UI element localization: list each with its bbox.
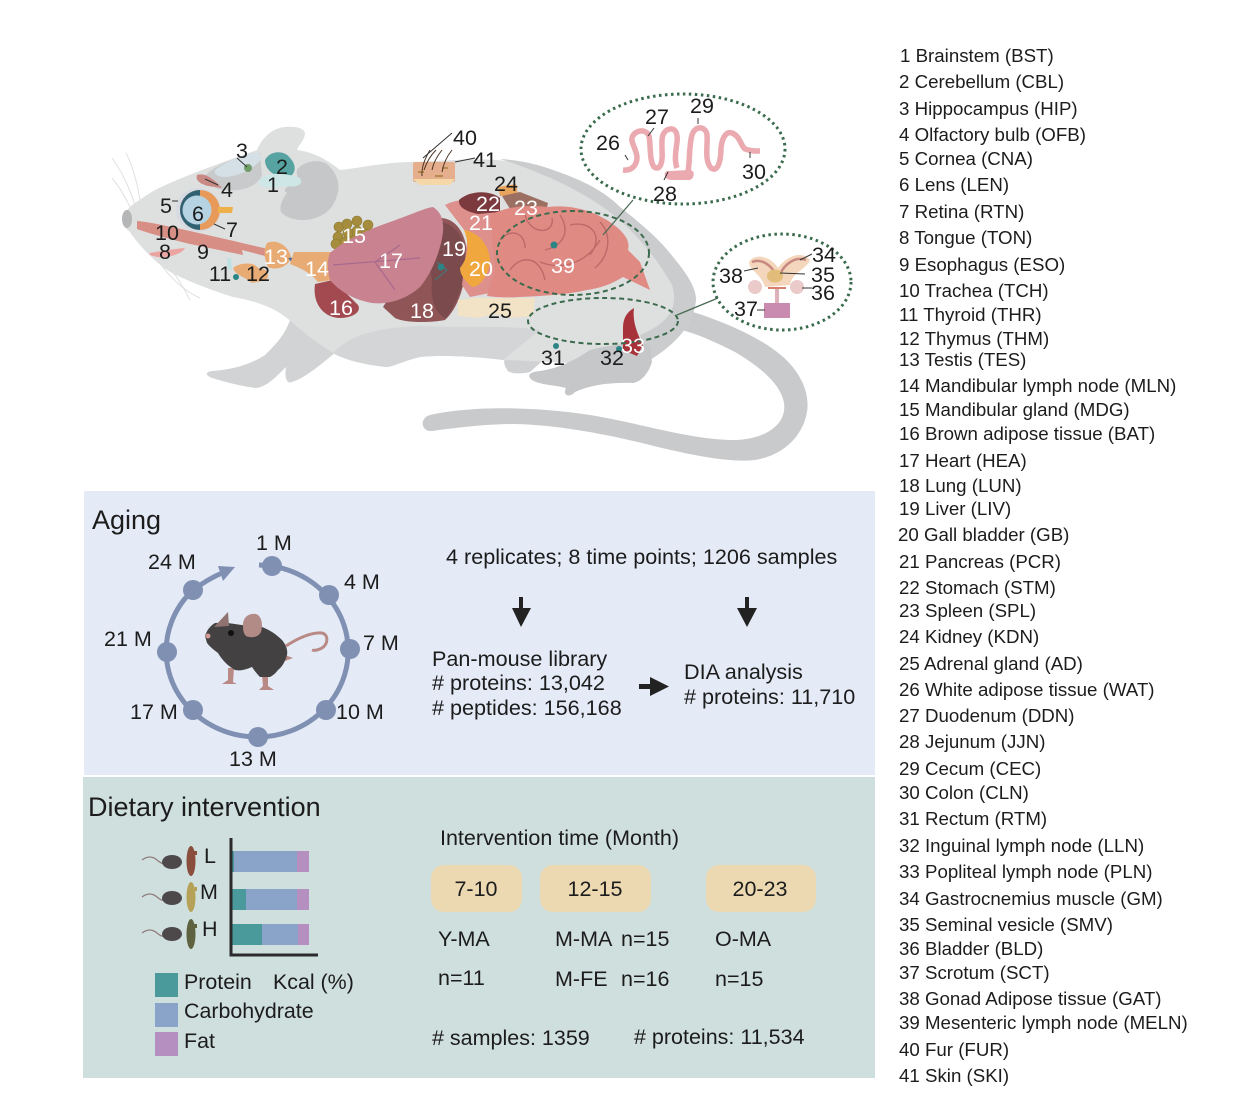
mandibular lymph node xyxy=(290,252,333,282)
callout connector lines xyxy=(603,200,718,315)
organ number labels: 29 xyxy=(690,94,714,118)
tissue list: 8 Tongue (TON) xyxy=(899,227,1032,248)
far hind foot xyxy=(504,356,548,373)
lung xyxy=(383,218,467,322)
organ number labels: 18 xyxy=(410,299,434,323)
tissue list: 39 Mesenteric lymph node (MELN) xyxy=(899,1012,1188,1033)
tissue list: 41 Skin (SKI) xyxy=(899,1065,1009,1086)
anatomical mouse diagram xyxy=(112,94,851,461)
panel: dietary intervention xyxy=(83,777,875,1078)
tissue list: 24 Kidney (KDN) xyxy=(899,626,1039,647)
organ number labels: 13 xyxy=(264,245,288,269)
tissue list: 3 Hippocampus (HIP) xyxy=(899,98,1078,119)
tissue list: 29 Cecum (CEC) xyxy=(899,758,1041,779)
liver xyxy=(430,222,466,318)
dashed ellipses xyxy=(497,94,851,344)
leader lines xyxy=(172,118,812,310)
organ number labels: 20 xyxy=(469,257,493,281)
time box: 20-23 xyxy=(706,865,816,912)
mouse tail xyxy=(423,311,808,461)
tissue list: 6 Lens (LEN) xyxy=(899,174,1009,195)
tissue list: 33 Popliteal lymph node (PLN) xyxy=(899,861,1152,882)
organ number labels: 6 xyxy=(192,202,204,226)
tissue list: 5 Cornea (CNA) xyxy=(899,148,1033,169)
organ number labels: 2 xyxy=(276,155,288,179)
time point ring: 24 M xyxy=(148,550,196,574)
legend: Carbohydrate xyxy=(184,999,314,1023)
testis xyxy=(264,242,291,269)
liver vessels xyxy=(435,262,447,280)
mice with feed icons xyxy=(142,844,218,949)
organ number labels: 41 xyxy=(473,148,497,172)
mice with feed icons: L xyxy=(204,844,216,868)
kidney xyxy=(498,184,518,196)
tissue list: 37 Scrotum (SCT) xyxy=(899,962,1050,983)
text: pan-mouse library: # peptides: 156,168 xyxy=(432,695,622,720)
time point ring xyxy=(104,531,399,771)
cerebellum xyxy=(265,152,295,177)
organ number labels: 3 xyxy=(236,139,248,163)
arrow: down left xyxy=(512,597,531,627)
time box: 12-15: 12-15 xyxy=(568,877,623,901)
mandibular gland xyxy=(331,216,373,249)
brown adipose tissue xyxy=(315,280,359,318)
tissue list: 19 Liver (LIV) xyxy=(899,498,1011,519)
legend: Fat xyxy=(184,1029,215,1053)
mice with feed icons: H xyxy=(202,917,218,941)
tissue list: 2 Cerebellum (CBL) xyxy=(899,71,1064,92)
tissue list xyxy=(898,45,1188,1086)
tissue list: 38 Gonad Adipose tissue (GAT) xyxy=(899,988,1161,1009)
text: pan-mouse library: Pan-mouse library xyxy=(432,646,607,671)
organ number labels: 9 xyxy=(197,240,209,264)
organ number labels: 1 xyxy=(267,173,279,197)
tissue list: 36 Bladder (BLD) xyxy=(899,938,1043,959)
organ number labels: 10 xyxy=(155,221,179,245)
group sample sizes: Y-MA xyxy=(438,927,490,951)
organ number labels: 17 xyxy=(379,249,403,273)
time point ring: 7 M xyxy=(363,631,399,655)
time point ring: 21 M xyxy=(104,627,152,651)
tissue list: 15 Mandibular gland (MDG) xyxy=(899,399,1130,420)
time box: 7-10: 7-10 xyxy=(454,877,498,901)
time box: 12-15 xyxy=(540,865,651,912)
mice with feed icons: M xyxy=(200,880,218,904)
whiskers xyxy=(112,153,200,300)
organ number labels: 24 xyxy=(494,172,518,196)
dietary totals: # proteins: 11,534 xyxy=(634,1025,805,1049)
tissue list: 10 Trachea (TCH) xyxy=(899,280,1049,301)
group sample sizes: O-MA xyxy=(715,927,772,951)
time point ring: 4 M xyxy=(344,570,380,594)
rectum and inguinal nodes xyxy=(553,343,559,349)
organ number labels: 14 xyxy=(305,257,329,281)
thymus and thyroid xyxy=(233,264,268,283)
organ number labels: 28 xyxy=(653,182,677,206)
spleen xyxy=(502,192,548,212)
dietary totals xyxy=(432,1025,805,1050)
tissue list: 20 Gall bladder (GB) xyxy=(898,524,1069,545)
tissue list: 18 Lung (LUN) xyxy=(899,475,1022,496)
mouse hind leg xyxy=(529,344,652,395)
dietary totals: # samples: 1359 xyxy=(432,1026,590,1050)
organ number labels: 19 xyxy=(442,237,466,261)
group sample sizes: n=16 xyxy=(621,967,669,991)
time box: 20-23: 20-23 xyxy=(732,877,788,901)
organ number labels: 15 xyxy=(342,224,366,248)
group sample sizes: M-MA xyxy=(555,927,613,951)
organ number labels: 38 xyxy=(719,264,743,288)
tissue list: 34 Gastrocnemius muscle (GM) xyxy=(899,888,1163,909)
organ number labels: 16 xyxy=(329,296,353,320)
panel: aging xyxy=(84,491,875,775)
arrow: down right xyxy=(737,597,757,627)
group sample sizes: M-FE xyxy=(555,967,608,991)
organ number labels: 4 xyxy=(221,178,233,202)
tissue list: 28 Jejunum (JJN) xyxy=(899,731,1045,752)
tissue list: 17 Heart (HEA) xyxy=(899,450,1027,471)
organ number labels: 37 xyxy=(734,297,758,321)
eye xyxy=(176,188,233,232)
tissue list: 16 Brown adipose tissue (BAT) xyxy=(899,423,1155,444)
text: replicates: 4 replicates; 8 time points; 1206 samples xyxy=(446,544,837,569)
mouse front legs xyxy=(207,320,335,388)
arrow: right xyxy=(639,677,669,696)
tissue list: 26 White adipose tissue (WAT) xyxy=(899,679,1154,700)
tissue list: 7 Retina (RTN) xyxy=(899,201,1024,222)
intestine tract inset xyxy=(623,128,760,180)
group sample sizes: n=11 xyxy=(438,966,485,990)
tissue list: 12 Thymus (THM) xyxy=(899,328,1049,349)
text: DIA analysis xyxy=(684,659,855,709)
organ number labels: 34 xyxy=(812,243,836,267)
heading: dietary intervention: Dietary intervention xyxy=(88,792,321,822)
skin xyxy=(413,150,455,185)
hippocampus xyxy=(244,164,252,172)
popliteal lymph node xyxy=(623,308,643,356)
tissue list: 21 Pancreas (PCR) xyxy=(899,551,1061,572)
organ number labels: 7 xyxy=(226,218,238,242)
text: DIA analysis: # proteins: 11,710 xyxy=(684,684,855,709)
time point ring: 17 M xyxy=(130,700,178,724)
legend: Protein xyxy=(184,970,252,994)
heading: intervention time: Intervention time (Month) xyxy=(440,826,679,850)
stacked bar chart xyxy=(231,838,318,955)
organ number labels: 26 xyxy=(596,131,620,155)
tissue list: 31 Rectum (RTM) xyxy=(899,808,1047,829)
tissue list: 9 Esophagus (ESO) xyxy=(899,254,1065,275)
nose xyxy=(122,210,132,228)
text: DIA analysis: DIA analysis xyxy=(684,659,803,684)
tissue list: 13 Testis (TES) xyxy=(899,349,1026,370)
organ number labels: 22 xyxy=(476,192,500,216)
mouse body xyxy=(123,127,696,367)
heading: aging: Aging xyxy=(92,505,161,535)
tissue list: 22 Stomach (STM) xyxy=(899,577,1056,598)
tissue list: 32 Inguinal lymph node (LLN) xyxy=(899,835,1144,856)
organ number labels: 35 xyxy=(811,263,835,287)
tongue xyxy=(149,248,185,257)
organ number labels: 36 xyxy=(811,281,835,305)
tissue list: 30 Colon (CLN) xyxy=(899,782,1029,803)
legend xyxy=(155,970,354,1056)
group sample sizes xyxy=(438,927,772,991)
organ number labels: 11 xyxy=(209,262,231,286)
organ number labels: 39 xyxy=(551,254,575,278)
organ number labels: 21 xyxy=(469,211,493,235)
large ear xyxy=(280,161,339,220)
tissue list: 1 Brainstem (BST) xyxy=(900,45,1054,66)
organ number labels: 25 xyxy=(488,299,512,323)
time point ring: 1 M xyxy=(256,531,292,555)
organ number labels: 33 xyxy=(621,334,645,358)
time point ring: 10 M xyxy=(336,700,384,724)
group sample sizes: n=15 xyxy=(715,967,763,991)
organ number labels: 8 xyxy=(159,240,171,264)
gall bladder xyxy=(460,230,490,287)
mesenteric lymph node xyxy=(550,242,558,248)
organ number labels: 31 xyxy=(541,346,565,370)
time box: 7-10 xyxy=(431,865,522,912)
organ number labels: 32 xyxy=(600,346,624,370)
reproductive organs inset xyxy=(748,255,810,318)
tissue list: 11 Thyroid (THR) xyxy=(899,304,1042,325)
legend: Kcal (%) xyxy=(273,970,354,994)
pancreas xyxy=(445,200,505,297)
back shading xyxy=(500,159,696,360)
tissue list: 27 Duodenum (DDN) xyxy=(899,705,1075,726)
organ number labels xyxy=(155,94,836,370)
organ number labels: 23 xyxy=(514,196,538,220)
tissue list: 40 Fur (FUR) xyxy=(899,1039,1009,1060)
trachea and esophagus xyxy=(137,221,268,256)
tissue list: 25 Adrenal gland (AD) xyxy=(899,653,1083,674)
brain xyxy=(197,152,301,190)
intestines xyxy=(487,206,650,297)
group sample sizes: n=15 xyxy=(621,927,669,951)
organ number labels: 30 xyxy=(742,160,766,184)
organ number labels: 27 xyxy=(645,105,669,129)
tissue list: 4 Olfactory bulb (OFB) xyxy=(899,124,1086,145)
organ number labels: 5 xyxy=(160,194,172,218)
olfactory bulb xyxy=(197,174,222,188)
icon: black mouse xyxy=(205,612,327,690)
tissue list: 14 Mandibular lymph node (MLN) xyxy=(899,375,1176,396)
belly shading xyxy=(333,326,540,367)
text: pan-mouse library: # proteins: 13,042 xyxy=(432,670,605,695)
tissue list: 35 Seminal vesicle (SMV) xyxy=(899,914,1113,935)
brainstem xyxy=(258,174,301,188)
tissue list: 23 Spleen (SPL) xyxy=(899,600,1036,621)
time point ring: 13 M xyxy=(229,747,277,771)
organ number labels: 40 xyxy=(453,126,477,150)
white adipose deposit xyxy=(458,298,535,318)
organ number labels: 12 xyxy=(246,262,270,286)
heart xyxy=(328,207,443,303)
text: pan-mouse library xyxy=(432,646,622,720)
stomach xyxy=(459,192,500,214)
